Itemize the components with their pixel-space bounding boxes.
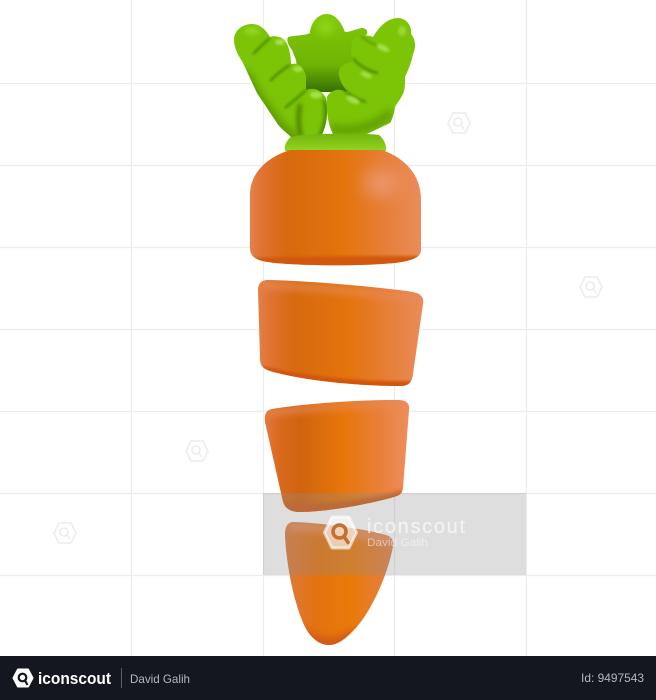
carrot slice 1 — [250, 150, 421, 270]
footer divider — [121, 668, 122, 688]
watermark icon 3 — [186, 441, 208, 461]
watermark band — [263, 493, 526, 575]
watermark icon 4 — [54, 523, 76, 543]
left finger creases — [253, 38, 270, 54]
watermark name: iconscout — [367, 516, 465, 538]
left leaf — [234, 24, 327, 140]
carrot slice 2 — [258, 280, 423, 392]
watermark icon 1 — [448, 113, 470, 133]
footer logo — [14, 670, 32, 686]
watermark icon 2 — [580, 277, 602, 297]
left leaf edge shading — [243, 72, 296, 140]
back star leaf — [287, 14, 367, 92]
green collar — [285, 134, 386, 151]
right leaf — [327, 18, 415, 134]
carrot slice 3 — [265, 400, 409, 516]
footer brand: iconscout — [38, 669, 111, 688]
left highlights — [244, 27, 260, 35]
right highlights — [375, 42, 391, 54]
footer id: Id: 9497543 — [581, 671, 644, 685]
right finger creases — [353, 58, 378, 73]
watermark logo — [324, 517, 356, 548]
footer author: David Galih — [130, 672, 190, 686]
carrot slice 4 — [285, 522, 393, 650]
small watermark icons — [54, 113, 602, 543]
right leaf shading — [330, 112, 392, 130]
footer bar — [0, 656, 656, 700]
watermark author: David Galih — [367, 537, 428, 549]
carrot leaves — [234, 14, 415, 151]
